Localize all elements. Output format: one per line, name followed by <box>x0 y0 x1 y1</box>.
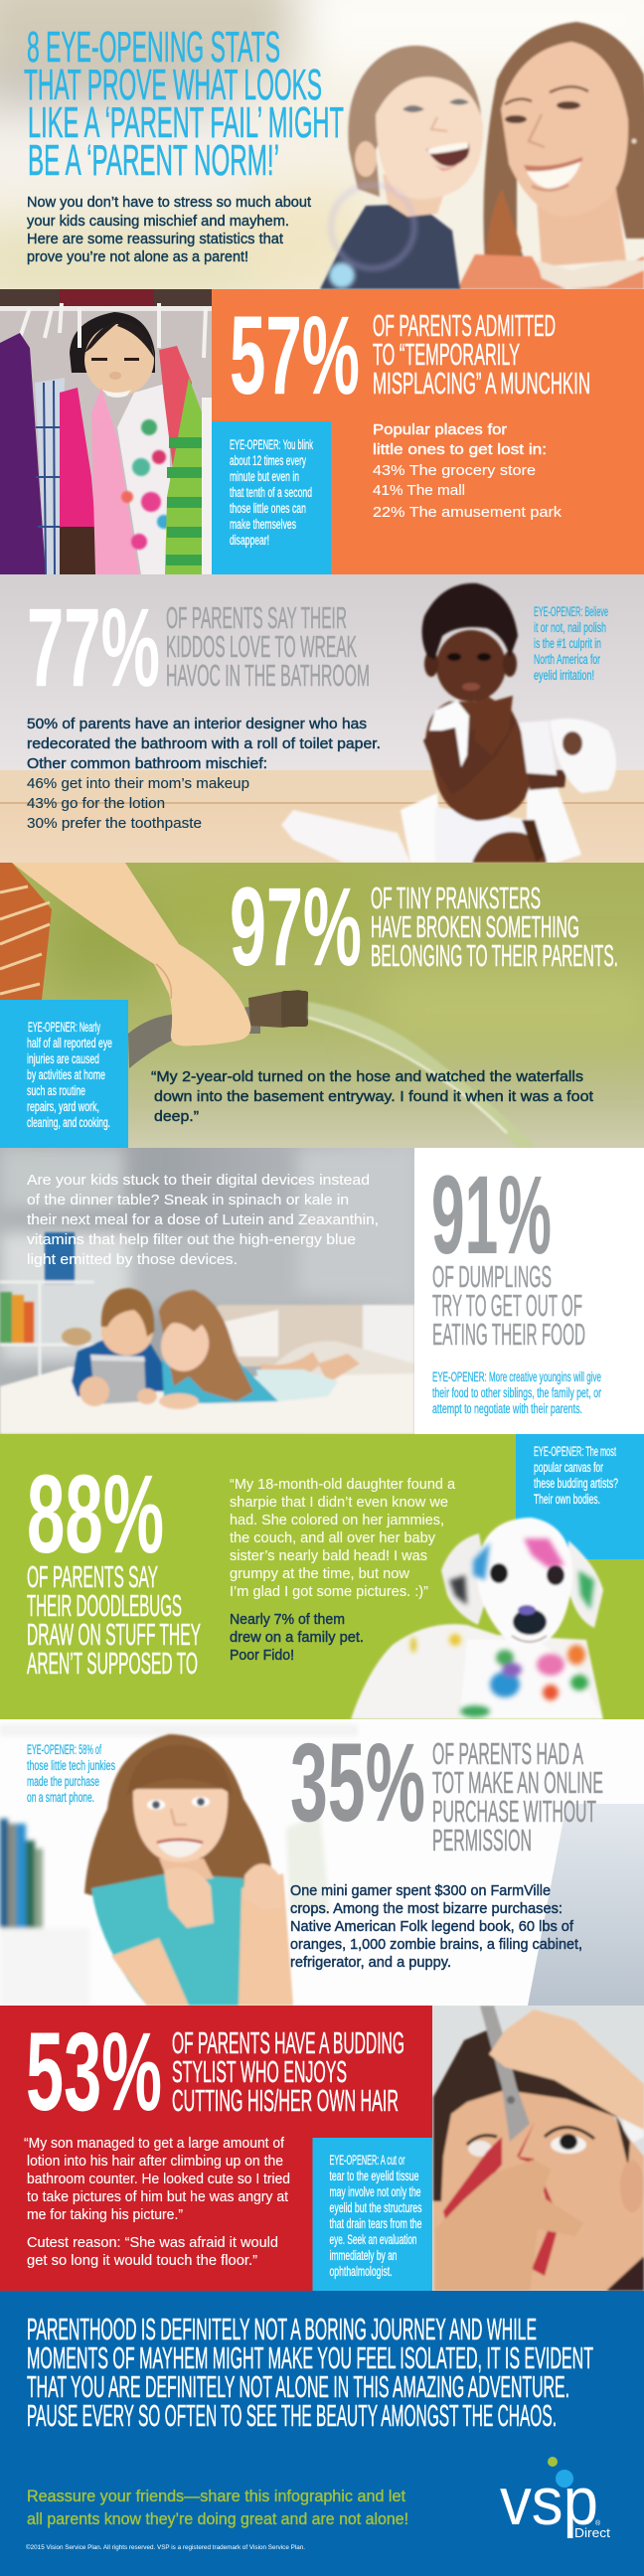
logo: VSP Direct: Direct <box>574 2525 610 2540</box>
intro text: your kids causing mischief and mayhem. <box>27 214 289 230</box>
callout: eye-opener <box>0 1000 128 1148</box>
stat number: 77% <box>27 585 160 710</box>
photo: puppy covered in paint <box>351 1518 603 1719</box>
callout: eye-opener: is the #1 culprit in <box>534 636 601 651</box>
title: THAT PROVE WHAT LOOKS <box>24 62 322 109</box>
quote: “My 18-month-old daughter found a <box>230 1476 456 1493</box>
photo: child hiding in closet <box>0 289 212 574</box>
call to action: all parents know they’re doing great and are not alone! <box>27 2509 408 2528</box>
panel: hero <box>0 0 644 308</box>
photo: baby with toilet paper <box>0 574 644 863</box>
stat number: 57% <box>230 293 360 417</box>
stat heading <box>432 1260 585 1352</box>
title: 8 EYE-OPENING STATS <box>27 24 280 72</box>
quote <box>230 1476 456 1600</box>
callout: eye-opener: eyelid irritation! <box>534 668 594 683</box>
stat heading: OF PARENTS SAY <box>27 1560 158 1594</box>
callout: eye-opener: about 12 times every <box>230 453 306 468</box>
callout: eye-opener: such as routine <box>27 1083 85 1098</box>
copyright: ©2015 Vision Service Plan. All rights reserved. VSP is a registered trademark of Vision Service Plan. <box>26 2544 305 2551</box>
text: bizarre purchases: oranges, 1,000 zombie brains, a filing cabinet, <box>290 1936 582 1953</box>
photo: kids with tablet on bed <box>0 1148 414 1434</box>
list: popular places: little ones to get lost in: <box>373 441 547 458</box>
stat heading <box>166 601 370 693</box>
callout: eye-opener: those little tech junkies <box>27 1758 115 1773</box>
text: bathroom mischief: redecorated the bathroom with a roll of toilet paper. <box>27 735 381 752</box>
text: bathroom mischief: 46% get into their mom’s makeup <box>27 775 249 792</box>
photo: boy cutting own hair <box>432 2006 644 2291</box>
quote: get so long it would touch the floor.” <box>27 2252 257 2269</box>
panel: 97% stat <box>0 863 644 1148</box>
text: digital devices: vitamins that help filter out the high-energy blue <box>27 1231 356 1248</box>
callout: eye-opener: by activities at home <box>27 1067 105 1082</box>
stat heading: DRAW ON STUFF THEY <box>27 1618 201 1652</box>
callout: eye-opener: make themselves <box>230 517 296 532</box>
stat heading: TO “TEMPORARILY <box>373 338 520 372</box>
text: family pet note: Poor Fido! <box>230 1647 294 1664</box>
stat heading: HAVOC IN THE BATHROOM <box>166 659 370 693</box>
text: digital devices <box>27 1172 379 1268</box>
stat number: 97% <box>230 865 362 989</box>
quote: deep.” <box>154 1108 199 1125</box>
callout: eye-opener: injuries are caused <box>27 1051 99 1066</box>
callout: eye-opener <box>212 421 331 574</box>
stat heading: KIDDOS LOVE TO WREAK <box>166 630 357 664</box>
text: bathroom mischief <box>27 716 381 832</box>
quote <box>151 1068 594 1125</box>
quote: “My 2-year-old turned on the hose and watched the waterfalls <box>151 1068 583 1085</box>
callout: eye-opener: eyelid but the structures <box>330 2200 422 2215</box>
callout: eye-opener: made the purchase <box>27 1774 99 1789</box>
title: LIKE A ‘PARENT FAIL’ MIGHT <box>28 99 344 147</box>
text: digital devices: of the dinner table? Sneak in spinach or kale in <box>27 1192 349 1208</box>
text: bizarre purchases: Native American Folk legend book, 60 lbs of <box>290 1918 574 1935</box>
text: bizarre purchases: One mini gamer spent $300 on FarmVille <box>290 1882 551 1899</box>
list: popular places: 43% The grocery store <box>373 462 536 479</box>
stat heading: STYLIST WHO ENJOYS <box>172 2055 347 2089</box>
stat heading: OF PARENTS SAY THEIR <box>166 601 347 635</box>
callout: eye-opener: Their own bodies. <box>534 1492 600 1507</box>
photo: child holding garden hose <box>0 863 644 1148</box>
stat heading <box>27 1560 201 1681</box>
text: digital devices: their next meal for a dose of Lutein and Zeaxanthin, <box>27 1211 379 1228</box>
panel: 88% stat <box>0 1434 644 1719</box>
quote: grumpy at the time, but now <box>230 1565 409 1582</box>
title <box>24 24 344 185</box>
list: popular places: 41% The mall <box>373 482 465 499</box>
logo: VSP Direct: vsp <box>500 2464 598 2539</box>
text: digital devices: Are your kids stuck to their digital devices instead <box>27 1172 370 1189</box>
text: bizarre purchases: refrigerator, and a puppy. <box>290 1954 451 1971</box>
quote: I’m glad I got some pictures. :)” <box>230 1583 428 1600</box>
callout: eye-opener <box>312 2138 432 2291</box>
stat heading: AREN’T SUPPOSED TO <box>27 1647 198 1681</box>
stat heading: PERMISSION <box>432 1824 532 1857</box>
callout: eye-opener: half of all reported eye <box>27 1036 112 1050</box>
photo: excited girl with laptop <box>0 1719 644 2006</box>
stat heading <box>371 882 618 973</box>
stat heading <box>373 309 590 401</box>
callout: eye-opener: EYE-OPENER: You blink <box>230 437 313 452</box>
quote: sister’s nearly bald head! I was <box>230 1547 427 1564</box>
list: popular places: Popular places for <box>373 421 507 438</box>
callout: eye-opener: may involve not only the <box>330 2184 421 2199</box>
panel: 53% stat <box>0 2006 644 2291</box>
stat heading <box>432 1737 603 1857</box>
quote: sharpie that I didn’t even know we <box>230 1494 448 1511</box>
stat heading <box>172 2026 404 2118</box>
title: BE A ‘PARENT NORM!’ <box>28 137 279 185</box>
stat heading: CUTTING HIS/HER OWN HAIR <box>172 2084 399 2118</box>
callout: eye-opener: tear to the eyelid tissue <box>330 2169 419 2183</box>
call to action: Reassure your friends—share this infographic and let <box>27 2487 405 2505</box>
quote: the couch, and all over her baby <box>230 1530 435 1546</box>
logo: VSP Direct: ® <box>595 2519 601 2527</box>
callout: eye-opener: it or not, nail polish <box>534 620 606 635</box>
panel: closing footer <box>0 2291 644 2576</box>
photo: mother and son <box>0 0 644 308</box>
callout: eye-opener: North America for <box>534 652 600 667</box>
intro text: Here are some reassuring statistics that <box>27 232 283 247</box>
callout: eye-opener: eye. Seek an evaluation <box>330 2232 417 2247</box>
panel: 91% stat <box>0 1148 644 1434</box>
callout: eye-opener <box>27 1742 115 1805</box>
quote: lotion into his hair after climbing up on the <box>27 2153 283 2170</box>
text: family pet note: Nearly 7% of them <box>230 1611 345 1628</box>
quote: down into the basement entryway. I found it when it was a foot <box>154 1088 594 1105</box>
callout: eye-opener: those little ones can <box>230 501 306 516</box>
quote: Cutest reason: “She was afraid it would <box>27 2234 278 2251</box>
callout: eye-opener: popular canvas for <box>534 1460 603 1475</box>
text: bizarre purchases <box>290 1882 582 1971</box>
callout: eye-opener: on a smart phone. <box>27 1790 94 1805</box>
quote: me for taking his picture.” <box>27 2206 183 2223</box>
closing message <box>27 2313 593 2433</box>
callout: eye-opener <box>432 1369 601 1416</box>
text: bathroom mischief: 30% prefer the toothpaste <box>27 815 202 832</box>
panel: 77% stat <box>0 574 644 863</box>
text: bathroom mischief: 43% go for the lotion <box>27 795 165 812</box>
callout: eye-opener: immediately by an <box>330 2248 398 2263</box>
text: bizarre purchases: crops. Among the most bizarre purchases: <box>290 1900 563 1917</box>
text: family pet note <box>230 1611 364 1664</box>
stat heading: THEIR DOODLEBUGS <box>27 1589 182 1623</box>
call to action <box>27 2487 408 2528</box>
callout: eye-opener: disappear! <box>230 533 269 548</box>
quote: bathroom counter. He looked cute so I tried <box>27 2171 290 2187</box>
callout: eye-opener: that drain tears from the <box>330 2216 421 2231</box>
callout: eye-opener: minute but even in <box>230 469 299 484</box>
callout: eye-opener: cleaning, and cooking. <box>27 1115 110 1130</box>
intro text: Now you don’t have to stress so much about <box>27 195 311 211</box>
quote: “My son managed to get a large amount of <box>24 2135 285 2152</box>
panel: 57% stat <box>0 289 644 574</box>
stat number: 53% <box>26 2010 162 2134</box>
text: digital devices: light emitted by those devices. <box>27 1251 238 1268</box>
callout: eye-opener: EYE-OPENER: Nearly <box>28 1020 100 1035</box>
callout: eye-opener: EYE-OPENER: 58% of <box>27 1742 101 1757</box>
callout: eye-opener <box>516 1434 644 1559</box>
stat heading: OF PARENTS HAVE A BUDDING <box>172 2026 404 2060</box>
intro text <box>27 195 311 265</box>
callout: eye-opener: EYE-OPENER: A cut or <box>330 2153 405 2168</box>
callout: eye-opener: repairs, yard work, <box>27 1099 99 1114</box>
list: popular places <box>373 421 563 521</box>
quote <box>24 2135 290 2269</box>
boy <box>320 46 483 289</box>
callout: eye-opener: that tenth of a second <box>230 485 312 500</box>
quote: to take pictures of him but he was angry at <box>27 2188 289 2205</box>
text: bathroom mischief: Other common bathroom mischief: <box>27 755 267 772</box>
text: bathroom mischief: 50% of parents have an interior designer who has <box>27 716 367 732</box>
stat number: 88% <box>27 1452 164 1576</box>
list: popular places: 22% The amusement park <box>373 504 563 521</box>
quote: had. She colored on her jammies, <box>230 1512 444 1529</box>
text: family pet note: drew on a family pet. <box>230 1629 364 1646</box>
mother <box>457 22 644 289</box>
panel: 35% stat <box>0 1719 644 2006</box>
intro text: prove you’re not alone as a parent! <box>27 249 248 265</box>
callout: eye-opener: ophthalmologist. <box>330 2264 392 2279</box>
stat number: 35% <box>290 1720 425 1845</box>
callout: eye-opener <box>534 604 608 683</box>
